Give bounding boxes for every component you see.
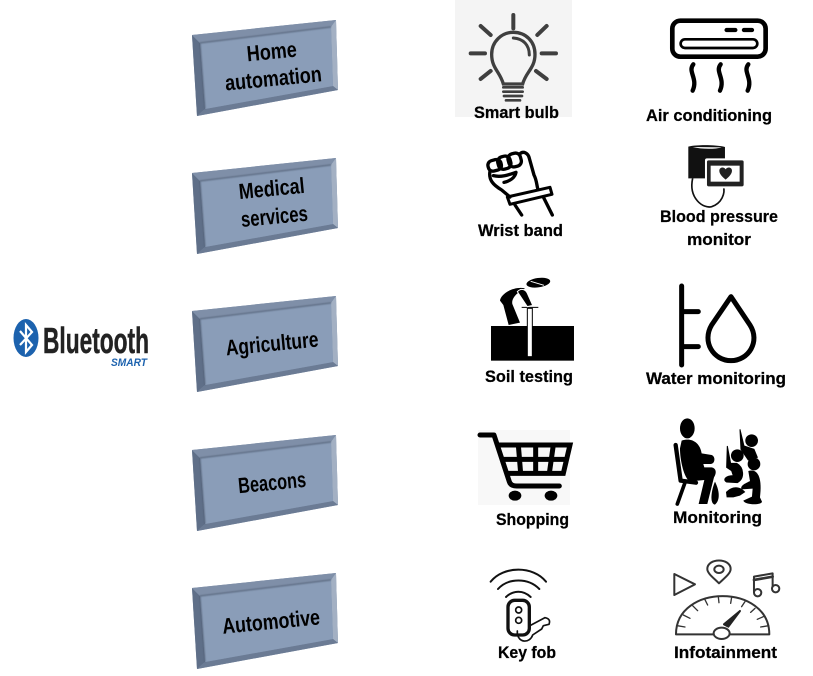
icon: air conditioning bbox=[672, 21, 766, 91]
icon: water monitoring bbox=[682, 286, 754, 365]
heading: Agriculture: Agriculture bbox=[225, 327, 320, 360]
panel: Automotive bbox=[192, 573, 338, 669]
heading: Home automation bbox=[221, 34, 323, 96]
heading: Automotive: Automotive bbox=[221, 604, 321, 639]
heading: Medical services: services bbox=[240, 201, 309, 232]
heading: Beacons: Beacons bbox=[237, 467, 307, 498]
heading: Medical services bbox=[237, 173, 309, 232]
icon: smart bulb bbox=[471, 15, 556, 100]
icon: infotainment dashboard bbox=[674, 560, 779, 639]
icon: monitoring teacher and children bbox=[676, 418, 762, 505]
logo: Bluetooth Smart bbox=[14, 319, 149, 369]
panel: Beacons bbox=[192, 435, 338, 531]
panel: Medical services bbox=[192, 158, 338, 254]
label: Water monitoring: Water monitoring bbox=[646, 369, 786, 388]
label: Key fob: Key fob bbox=[498, 643, 556, 662]
label: Wrist band: Wrist band bbox=[478, 221, 563, 240]
panel: Home automation bbox=[192, 20, 338, 116]
label: Infotainment: Infotainment bbox=[674, 643, 777, 662]
heading: Home automation: automation bbox=[224, 61, 323, 96]
label: Monitoring: Monitoring bbox=[673, 508, 762, 527]
logo subtitle: SMART bbox=[111, 357, 148, 369]
label: Blood pressure monitor bbox=[660, 207, 778, 249]
panel: Agriculture bbox=[192, 296, 338, 392]
icon background: shopping cart bbox=[478, 430, 570, 505]
label: Shopping: Shopping bbox=[496, 510, 569, 529]
icon: soil testing bbox=[491, 276, 574, 361]
icon: shopping cart bbox=[480, 435, 570, 501]
label: Blood pressure monitor: monitor bbox=[687, 230, 751, 249]
icon: wrist band bbox=[487, 152, 552, 215]
label: Soil testing: Soil testing bbox=[485, 367, 573, 386]
heading: Medical services: Medical bbox=[238, 173, 306, 204]
label: Smart bulb: Smart bulb bbox=[474, 103, 559, 122]
icon: blood pressure monitor bbox=[688, 145, 745, 207]
icon background: smart bulb bbox=[455, 0, 572, 117]
icon: Bluetooth rune bbox=[14, 319, 38, 357]
logo wordmark: Bluetooth bbox=[43, 320, 149, 361]
heading: Home automation: Home bbox=[246, 37, 298, 66]
label: Air conditioning: Air conditioning bbox=[646, 106, 772, 125]
icon: key fob bbox=[491, 570, 550, 641]
label: Blood pressure monitor: Blood pressure bbox=[660, 207, 778, 226]
